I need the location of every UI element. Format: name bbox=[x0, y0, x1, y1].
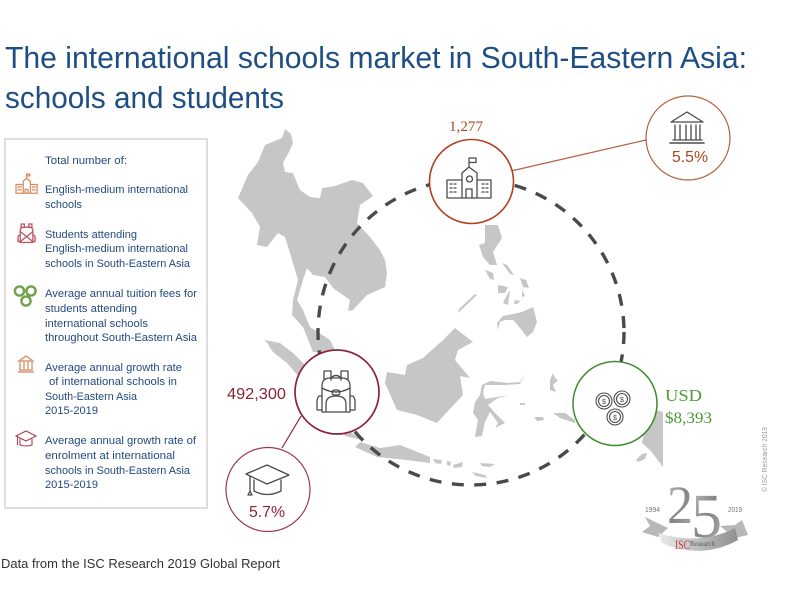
icon: coins: $ bbox=[620, 397, 624, 404]
legend text: tuition fees: Average annual tuition fees for bbox=[45, 288, 197, 300]
value: 1,277 schools: 1,277 bbox=[449, 119, 484, 135]
year 1994: 1994 bbox=[645, 507, 660, 514]
mainland and Malay peninsula bbox=[238, 129, 387, 352]
legend text: school growth: 2015-2019 bbox=[45, 405, 98, 417]
legend text: schools: schools bbox=[45, 199, 82, 211]
ribbon band bbox=[658, 528, 738, 551]
value: 5.5%: 5.5% bbox=[672, 149, 708, 166]
dashed ring bbox=[318, 179, 624, 485]
legend text: students: English-medium international bbox=[45, 243, 188, 255]
legend text: schools: English-medium international bbox=[45, 184, 188, 196]
Philippines bbox=[458, 225, 537, 337]
icon: coins bbox=[596, 391, 630, 425]
node: schools bbox=[430, 140, 514, 224]
number 25 bbox=[667, 475, 722, 551]
legend text: tuition fees bbox=[45, 288, 198, 344]
connector: schools to growth bbox=[511, 140, 646, 171]
legend heading: Total number of: bbox=[45, 155, 127, 167]
connector: students to growth bbox=[282, 416, 301, 448]
ribbon wings bbox=[642, 517, 748, 538]
legend text: students bbox=[45, 229, 191, 270]
legend text: school growth: Average annual growth rate bbox=[45, 362, 182, 374]
Java bbox=[355, 442, 430, 463]
logo: ISC Research 25 years: Research bbox=[690, 540, 715, 548]
legend text: students: schools in South-Eastern Asia bbox=[45, 258, 191, 270]
legend icon: coins bbox=[15, 286, 36, 306]
title: The international schools market in South-Eastern Asia: bbox=[5, 40, 747, 75]
source note: Data from the ISC Research 2019 Global Report bbox=[1, 556, 280, 571]
node: enrolment growth bbox=[226, 448, 310, 532]
legend box bbox=[5, 139, 207, 508]
legend icon: institution bbox=[18, 356, 34, 372]
legend text: schools bbox=[45, 184, 188, 211]
legend text: enrolment growth: schools in South-Eastern Asia bbox=[45, 465, 191, 477]
value: USD $8,393 bbox=[665, 386, 712, 427]
legend text: enrolment growth: Average annual growth rate of bbox=[45, 435, 197, 447]
map of South-Eastern Asia bbox=[238, 129, 663, 478]
logo: ISC Research 25 years bbox=[642, 475, 748, 552]
legend text: enrolment growth bbox=[45, 435, 197, 491]
value: 492,300 students: 492,300 bbox=[227, 386, 286, 403]
value: USD $8,393: USD bbox=[665, 386, 702, 405]
logo wordmark: ISC bbox=[675, 537, 690, 552]
legend text: tuition fees: throughout South-Eastern Asia bbox=[45, 332, 198, 344]
node: school growth bbox=[646, 96, 730, 180]
legend icon: graduation cap bbox=[16, 431, 36, 446]
icon: school building bbox=[447, 158, 491, 198]
legend text: school growth: South-Eastern Asia bbox=[45, 391, 138, 403]
value: USD $8,393: $8,393 bbox=[665, 410, 712, 427]
title bbox=[5, 40, 747, 115]
year 2019: 2019 bbox=[728, 507, 742, 514]
value: 5.7%: 5.7% bbox=[249, 504, 285, 521]
legend text: enrolment growth: 2015-2019 bbox=[45, 479, 98, 491]
legend icon: school bbox=[16, 174, 37, 193]
Lesser Sunda islands bbox=[433, 459, 495, 478]
title: schools and students bbox=[5, 80, 284, 115]
legend icon: backpack bbox=[18, 224, 35, 242]
Sulawesi bbox=[473, 374, 525, 437]
legend text: tuition fees: international schools bbox=[45, 318, 148, 330]
Maluku islands bbox=[520, 373, 575, 423]
legend text: students: Students attending bbox=[45, 229, 137, 241]
node: students bbox=[295, 350, 379, 434]
New Guinea bbox=[642, 410, 663, 467]
legend text: school growth: of international schools in bbox=[49, 376, 177, 388]
legend text: tuition fees: students attending bbox=[45, 303, 137, 315]
panel: legend bbox=[5, 139, 207, 508]
legend text: enrolment growth: enrolment at international bbox=[45, 450, 175, 462]
node: tuition fees bbox=[573, 362, 657, 446]
number 25: 2 bbox=[667, 475, 693, 535]
legend text: school growth bbox=[45, 362, 182, 417]
number 25: 5 bbox=[691, 483, 722, 551]
Sumatra bbox=[265, 340, 362, 440]
icon: coins: $ bbox=[613, 415, 617, 422]
icon: institution bbox=[670, 112, 704, 143]
icon: backpack bbox=[317, 371, 355, 412]
icon: graduation cap bbox=[246, 465, 289, 495]
copyright note: © ISC Research 2019 bbox=[760, 427, 769, 492]
icon: coins: $ bbox=[602, 399, 606, 406]
Borneo bbox=[385, 328, 473, 423]
